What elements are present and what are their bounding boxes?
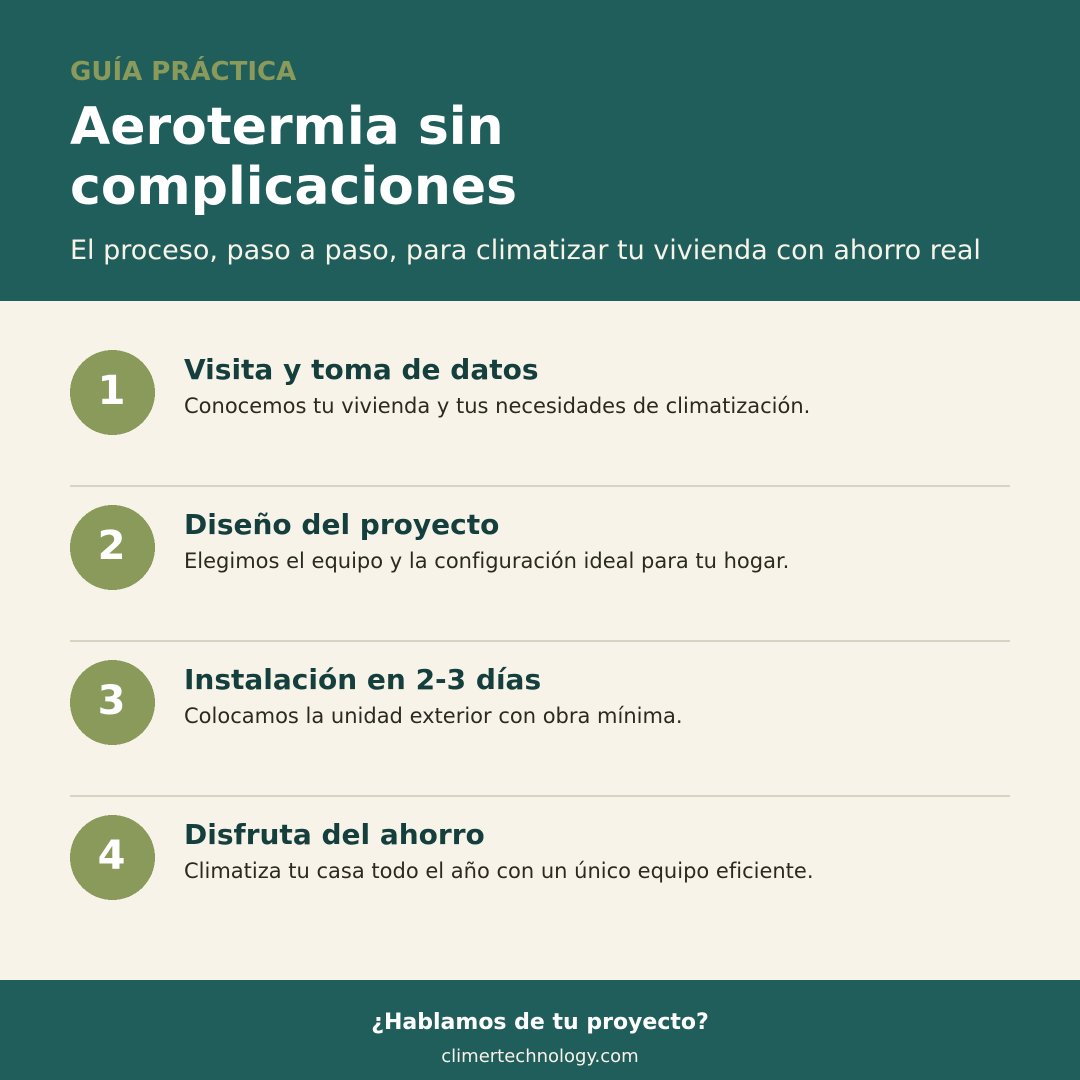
eyebrow: GUÍA PRÁCTICA — [70, 57, 296, 87]
step 1 heading: Visita y toma de datos — [184, 353, 539, 386]
number badge 4 — [70, 815, 155, 900]
step 3 heading: Instalación en 2-3 días — [184, 663, 541, 696]
number badge 1: 1 — [98, 368, 125, 414]
step 3 description: Colocamos la unidad exterior con obra mínima. — [184, 704, 682, 728]
website: climertechnology.com — [441, 1046, 639, 1067]
subtitle: El proceso, paso a paso, para climatizar tu vivienda con ahorro real — [70, 235, 981, 266]
header panel — [0, 0, 1080, 301]
number badge 3: 3 — [98, 678, 125, 724]
step 3 — [70, 660, 682, 745]
step 2 heading: Diseño del proyecto — [184, 508, 499, 541]
title: complicaciones — [70, 157, 517, 217]
title — [70, 97, 517, 217]
step 4 — [70, 815, 814, 900]
title: Aerotermia sin — [70, 97, 504, 157]
step 2 description: Elegimos el equipo y la configuración ideal para tu hogar. — [184, 549, 789, 573]
number badge 1 — [70, 350, 155, 435]
step 4 heading: Disfruta del ahorro — [184, 818, 485, 851]
step 4 description: Climatiza tu casa todo el año con un único equipo eficiente. — [184, 859, 814, 883]
number badge 2 — [70, 505, 155, 590]
number badge 2: 2 — [98, 523, 125, 569]
step 2 — [70, 505, 789, 590]
footer panel — [0, 980, 1080, 1080]
call to action: ¿Hablamos de tu proyecto? — [371, 1010, 709, 1035]
number badge 3 — [70, 660, 155, 745]
step 1 — [70, 350, 810, 435]
number badge 4: 4 — [98, 833, 125, 879]
step 1 description: Conocemos tu vivienda y tus necesidades de climatización. — [184, 394, 810, 418]
